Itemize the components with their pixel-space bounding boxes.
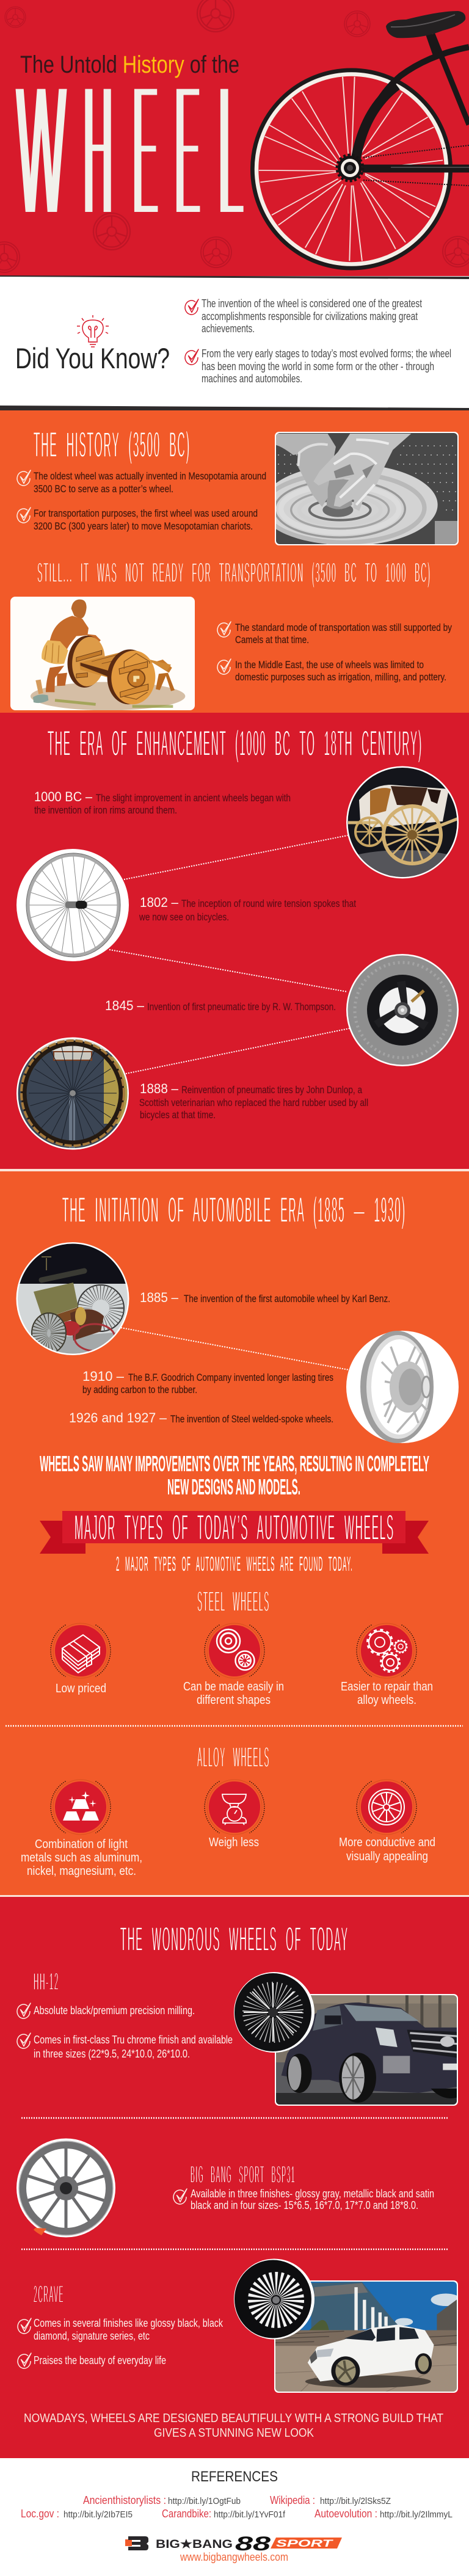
bicycle illustration <box>253 11 469 268</box>
title word: WHEEL: E <box>175 44 200 257</box>
reference list: http://bit.ly/2Ib7EI5 <box>64 2509 133 2520</box>
title line: The Untold History of the <box>20 51 239 78</box>
label: easier to repair: Easier to repair than <box>341 1680 433 1694</box>
icon: check <box>18 2318 31 2334</box>
ribbon banner <box>40 1508 429 1554</box>
text block: transportation purposes: 3200 BC (300 years later) to move Mesopotamian chariots. <box>34 520 253 532</box>
icon: check <box>217 622 231 637</box>
label: different shapes: different shapes <box>197 1694 271 1707</box>
text block: 1888: 1888 – <box>140 1081 179 1096</box>
wheel: big bang sport <box>16 2139 115 2238</box>
photo: benz motorwagen <box>16 1242 129 1357</box>
stripe divider <box>0 1895 469 1897</box>
illustration: man with wooden wheels <box>10 597 195 710</box>
text block: 1888 <box>139 1081 368 1121</box>
text: three finishes <box>191 2188 434 2211</box>
label: easier to repair <box>341 1680 433 1707</box>
panel: automobile era and types: ALLOY WHEELS <box>197 1741 270 1773</box>
text block: 1845: 1845 – <box>105 998 145 1013</box>
logo: big bang sport <box>125 2533 342 2555</box>
text block: 1802: we now see on bicycles. <box>139 912 229 923</box>
text block: 1926 and 1927: 1926 and 1927 – <box>69 1410 167 1425</box>
panel: wondrous wheels of today <box>0 1897 469 2458</box>
wheel: HH-12 <box>234 1972 314 2053</box>
icon: wheel shapes <box>205 1623 264 1678</box>
text block: 1000 BC <box>34 789 291 816</box>
icon: check <box>173 2189 187 2204</box>
photo: steel wire wheel <box>346 1331 459 1443</box>
text block: oldest wheel <box>34 470 266 495</box>
text block: 1885: 1885 – <box>140 1290 179 1305</box>
heading: references: REFERENCES <box>191 2469 278 2485</box>
panel: references <box>21 2469 453 2563</box>
text: tru chrome <box>34 2034 233 2060</box>
panel: hero: L <box>219 44 243 257</box>
icon: check <box>18 2353 31 2368</box>
label: weigh less: Weigh less <box>209 1836 259 1849</box>
text block: 1910: The B.F. Goodrich Company invented longer lasting tires <box>128 1372 333 1383</box>
text block: camels: Camels at that time. <box>235 634 309 646</box>
label: different shapes: Can be made easily in <box>183 1680 284 1694</box>
panel: hero <box>0 0 469 276</box>
text block: 1802: The inception of round wire tension spokes that <box>181 898 356 909</box>
text block: middle east <box>235 659 446 683</box>
reference list: Ancienthistorylists : <box>83 2494 166 2506</box>
icon: alloy wheel <box>357 1780 416 1835</box>
photo: potter's hands <box>263 432 459 545</box>
photo: white suv <box>274 2280 461 2394</box>
reference list: Autoevolution : <box>314 2508 377 2520</box>
text: beauty of everyday life: Praises the beauty of everyday life <box>34 2354 166 2367</box>
text block: 1885 <box>140 1290 390 1305</box>
label: more conductive <box>339 1836 435 1863</box>
panel: automobile era and types <box>0 1171 469 1895</box>
text block: middle east: In the Middle East, the use of wheels was limited to <box>235 659 424 671</box>
panel: wondrous wheels of today: HH-12 <box>34 1968 59 1995</box>
title word: WHEEL: H <box>84 44 112 257</box>
statement: improvements <box>40 1451 429 1499</box>
text block: 1845 <box>105 998 336 1013</box>
text: tru chrome: Comes in first-class Tru chrome finish and available <box>34 2034 233 2046</box>
label: combination of metals <box>21 1838 142 1878</box>
text block: 1888: Reinvention of pneumatic tires by John Dunlop, a <box>181 1085 363 1096</box>
label: easier to repair: alloy wheels. <box>357 1694 416 1707</box>
label: combination of metals: metals such as aluminum, <box>21 1851 142 1865</box>
text block: transportation purposes <box>34 508 258 532</box>
panel: did you know <box>15 297 451 385</box>
reference list: Wikipedia : <box>270 2494 315 2506</box>
text block: 1926 and 1927 <box>69 1410 333 1425</box>
photo: spoked bicycle wheel <box>16 849 129 961</box>
icon: check <box>185 349 198 365</box>
icon: light bulb <box>77 315 109 347</box>
icon: check <box>17 2033 31 2048</box>
connector dotted line <box>121 1328 349 1370</box>
website url: www.bigbangwheels.com <box>180 2551 288 2563</box>
text block: 1888: Scottish veterinarian who replaced the hard rubber used by all <box>139 1097 368 1108</box>
logo: big bang sport: BIG★BANG <box>156 2538 233 2551</box>
reference list: http://bit.ly/2lSks5Z <box>320 2496 391 2506</box>
label: different shapes <box>183 1680 284 1707</box>
text: several finishes: Comes in several finishes like glossy black, black <box>34 2317 224 2329</box>
reference list <box>21 2494 453 2520</box>
reference list: http://bit.ly/1OgtFub <box>168 2496 241 2506</box>
photo: pneumatic tire <box>346 954 459 1066</box>
hero divider stripe <box>0 275 469 279</box>
logo: big bang sport: 88 <box>235 2533 271 2555</box>
panel: era of enhancement <box>0 713 469 1170</box>
text: several finishes <box>34 2317 224 2342</box>
text: three finishes: black and in four sizes- 15*6.5, 16*7.0, 17*7.0 and 18*8.0. <box>191 2199 418 2211</box>
panel: automobile era and types: STEEL WHEELS <box>197 1585 270 1617</box>
dotted divider <box>5 1725 463 1726</box>
icon: check <box>17 2003 31 2018</box>
dotted divider <box>21 2249 448 2250</box>
watermark wheels <box>0 0 469 272</box>
text block: oldest wheel: The oldest wheel was actually invented in Mesopotamia around <box>34 470 266 482</box>
icon: check <box>17 470 31 486</box>
text block: 1885: The invention of the first automobile wheel by Karl Benz. <box>184 1293 390 1304</box>
label: combination of metals: Combination of light <box>35 1838 128 1851</box>
wheel: 2crave <box>234 2258 314 2339</box>
text block: 1000 BC: 1000 BC – <box>34 789 93 804</box>
text block: oldest wheel: 3500 BC to serve as a potter’s wheel. <box>34 483 173 495</box>
reference list: Carandbike: <box>162 2508 211 2520</box>
reference list: Loc.gov : <box>21 2508 59 2520</box>
heading: did you know: Did You Know? <box>15 342 170 374</box>
panel: history <box>0 410 469 713</box>
label: more conductive: visually appealing <box>346 1850 428 1863</box>
icon: weighing scale <box>205 1780 264 1835</box>
text block: 1000 BC: The slight improvement in ancient wheels began with <box>96 793 291 804</box>
photo: dunlop wheel <box>16 1037 129 1150</box>
section divider stripe <box>0 406 469 410</box>
label: more conductive: More conductive and <box>339 1836 435 1849</box>
reference list: http://bit.ly/1YvF01f <box>214 2509 286 2520</box>
text block: 1910 <box>82 1369 333 1395</box>
photo: chariot <box>346 766 459 878</box>
icon: gears <box>357 1623 416 1678</box>
icon: check <box>17 508 31 523</box>
connector dotted lines <box>109 835 349 1074</box>
text block: 1888: bicycles at that time. <box>140 1110 216 1121</box>
text: absolute black: Absolute black/premium precision milling. <box>34 2004 195 2017</box>
text: several finishes: diamond, signature series, etc <box>34 2330 150 2342</box>
icon: check <box>217 659 231 674</box>
icon: metal bars <box>51 1780 111 1835</box>
text block: 1910: by adding carbon to the rubber. <box>82 1384 197 1395</box>
icon: check <box>185 299 198 315</box>
title word: WHEEL: E <box>133 44 158 257</box>
reference list: http://bit.ly/2IlmmyL <box>380 2509 453 2520</box>
text block: 1000 BC: the invention of iron rims around them. <box>34 805 177 816</box>
text block: 1845: Invention of first pneumatic tire by R. W. Thompson. <box>147 1002 336 1013</box>
text block: fact one <box>202 297 422 335</box>
logo: big bang sport: SPORT <box>276 2538 334 2549</box>
title word: WHEEL: W <box>16 44 67 257</box>
photo: dark suv <box>274 1993 459 2107</box>
stripe divider <box>0 1169 469 1171</box>
text block: fact two: machines and automobiles. <box>202 373 302 385</box>
text: tru chrome: in three sizes (22*9.5, 24*10.0, 26*10.0. <box>34 2048 190 2060</box>
label: low priced: Low priced <box>56 1682 106 1695</box>
closing statement: GIVES A STUNNING NEW LOOK <box>154 2426 314 2440</box>
text block: camels <box>235 622 452 646</box>
label: combination of metals: nickel, magnesium, etc. <box>27 1865 136 1878</box>
text block: 1802 <box>139 895 356 923</box>
text block: 1926 and 1927: The invention of Steel welded-spoke wheels. <box>170 1414 333 1425</box>
closing statement <box>24 2412 443 2440</box>
text block: fact one: achievements. <box>202 322 255 335</box>
text block: fact two <box>202 347 451 385</box>
icon: cash stack <box>51 1623 111 1678</box>
text block: 1802: 1802 – <box>140 895 179 910</box>
text block: transportation purposes: For transportation purposes, the first wheel was used around <box>34 508 258 519</box>
text block: 1910: 1910 – <box>82 1369 125 1384</box>
dotted divider <box>21 2117 448 2119</box>
panel: wondrous wheels of today: 2CRAVE <box>34 2281 64 2308</box>
